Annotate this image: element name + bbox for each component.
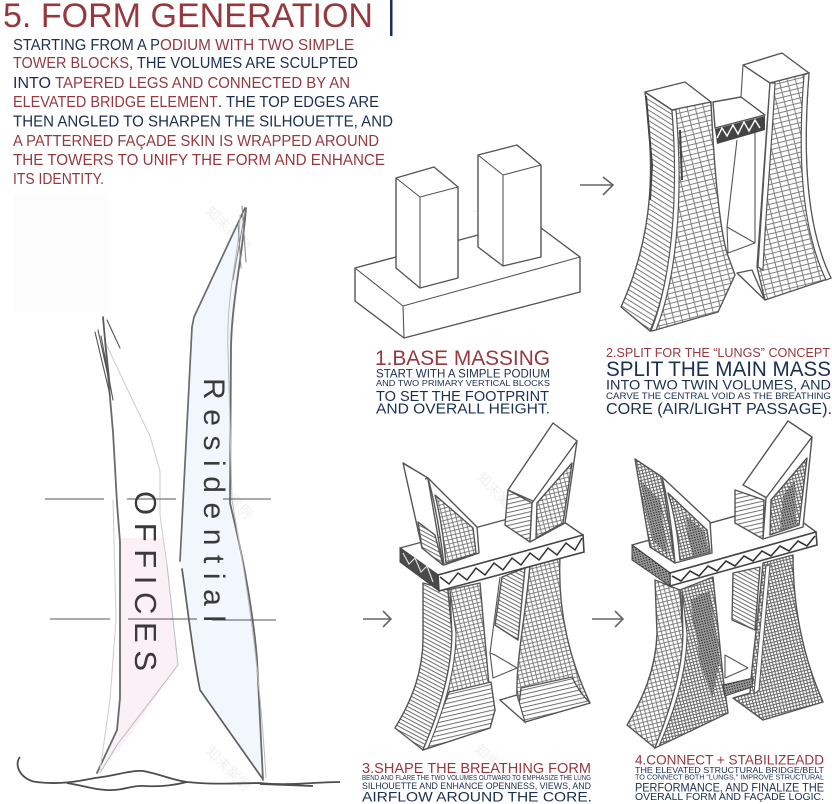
- watermarks: 知末案例: [203, 203, 254, 254]
- intro paragraph: A PATTERNED FAÇADE SKIN IS WRAPPED AROUND: [13, 133, 379, 150]
- right top piece: [735, 421, 812, 539]
- intro paragraph: ELEVATED BRIDGE ELEMENT: [13, 94, 218, 111]
- left leg: [627, 577, 728, 748]
- intro paragraph: , THE VOLUMES ARE SCULPTED: [129, 55, 358, 72]
- central void: [495, 568, 525, 640]
- watermarks: 知末案例: [743, 471, 794, 522]
- intro paragraph: THEN ANGLED TO SHARPEN THE SILHOUETTE, AND: [13, 114, 393, 130]
- intro paragraph: INTO: [13, 75, 51, 92]
- label: step 2 split for the lungs: CORE (AIR/LIGHT PASSAGE).: [606, 401, 832, 418]
- sketch: handwritten label offices: OFFICES: [128, 491, 163, 671]
- watermarks: 知末案例: [474, 469, 525, 520]
- label: step 4 connect and stabilize: THE ELEVATED STRUCTURAL BRIDGE/BELT: [635, 766, 824, 775]
- intro paragraph: ODIUM WITH TWO SIMPLE: [160, 37, 354, 54]
- label: step 1 base massing: 1.BASE MASSING: [375, 347, 550, 370]
- diagram 2: split for the lungs: [621, 53, 831, 331]
- right block: [478, 145, 541, 266]
- central void: [732, 567, 760, 630]
- hand sketch of two towers: [13, 195, 340, 790]
- diagram 1: base massing: [355, 145, 580, 338]
- label: step 2 split for the lungs: INTO TWO TWIN VOLUMES, AND: [606, 376, 831, 392]
- label: step 4 connect and stabilize: OVERALL FORM AND FAÇADE LOGIC.: [635, 791, 824, 803]
- podium: [355, 228, 580, 338]
- label: step 4 connect and stabilize: PERFORMANCE, AND FINALIZE THE: [635, 782, 824, 794]
- label: step 2 split for the lungs: 2.SPLIT FOR THE “LUNGS” CONCEPT: [606, 346, 830, 360]
- right tower: [737, 53, 831, 300]
- sketch: ground line: [18, 757, 340, 790]
- left top piece: [403, 463, 479, 565]
- left block: [396, 167, 458, 288]
- label: step 1 base massing: [375, 347, 550, 418]
- watermarks: 知末案例: [471, 201, 522, 252]
- label: step 2 split for the lungs: [606, 346, 832, 418]
- watermarks: 知末案例: [203, 743, 254, 794]
- connecting band: [400, 509, 584, 591]
- label: step 3 shape the breathing form: SILHOUETTE AND ENHANCE OPENNESS, VIEWS, AND: [362, 781, 591, 792]
- intro paragraph: TOWER BLOCKS: [13, 55, 129, 72]
- sketch: residential tower fill: [180, 208, 263, 778]
- bridge: [713, 97, 765, 128]
- arrow to step 3: [363, 611, 391, 627]
- left tower: [621, 82, 735, 331]
- bridge truss: [715, 116, 765, 144]
- lower bridge: [723, 678, 753, 696]
- arrow from step 1 to step 2: [580, 177, 613, 195]
- intro paragraph: TAPERED LEGS AND CONNECTED BY AN: [55, 75, 350, 92]
- left top piece: [635, 459, 712, 563]
- intro paragraph: STARTING FROM A P: [13, 37, 160, 54]
- intro paragraph: THE TOWERS TO UNIFY THE FORM AND ENHANCE: [13, 152, 385, 169]
- watermarks: 知末案例: [472, 741, 523, 792]
- diagram 4: connect and stabilize: [627, 421, 823, 748]
- intro paragraph: . THE TOP EDGES ARE: [218, 94, 379, 111]
- intro paragraph: ITS IDENTITY.: [13, 171, 104, 188]
- label: step 1 base massing: TO SET THE FOOTPRINT: [376, 389, 549, 405]
- left leg: [395, 583, 495, 750]
- label: step 2 split for the lungs: SPLIT THE MAIN MASS: [606, 358, 831, 381]
- right top piece: [505, 423, 577, 542]
- label: step 4 connect and stabilize: [635, 751, 824, 803]
- label: step 1 base massing: START WITH A SIMPLE PODIUM: [376, 368, 550, 381]
- label: step 1 base massing: AND OVERALL HEIGHT.: [376, 402, 550, 418]
- label: step 3 shape the breathing form: BEND AND FLARE THE TWO VOLUMES OUTWARD TO EMPHASIZE THE LUNG: [362, 775, 591, 782]
- title accent bar: [390, 0, 392, 36]
- label: step 4 connect and stabilize: TO CONNECT BOTH “LUNGS,” IMPROVE STRUCTURAL: [635, 775, 824, 782]
- label: step 2 split for the lungs: CARVE THE CENTRAL VOID AS THE BREATHING: [606, 391, 831, 401]
- right leg: [733, 555, 823, 720]
- label: step 4 connect and stabilize: 4.CONNECT + STABILIZEADD: [635, 751, 824, 767]
- sketch: offices tower fill: [100, 538, 178, 772]
- connecting band: [632, 504, 817, 586]
- label: step 3 shape the breathing form: [362, 761, 592, 804]
- label: step 3 shape the breathing form: 3.SHAPE THE BREATHING FORM: [362, 761, 591, 777]
- void and rear faces: [727, 65, 755, 253]
- label: step 1 base massing: AND TWO PRIMARY VERTICAL BLOCKS: [376, 379, 550, 388]
- watermarks: [203, 201, 794, 794]
- intro paragraph: [13, 37, 393, 188]
- arrow to step 4: [592, 611, 623, 627]
- sketch: section lines: [45, 499, 276, 620]
- sketch: handwritten label residential: Residential: [197, 378, 230, 622]
- right leg: [500, 557, 590, 722]
- watermarks: 知末案例: [205, 471, 256, 522]
- diagram 3: shape the breathing form: [395, 423, 590, 750]
